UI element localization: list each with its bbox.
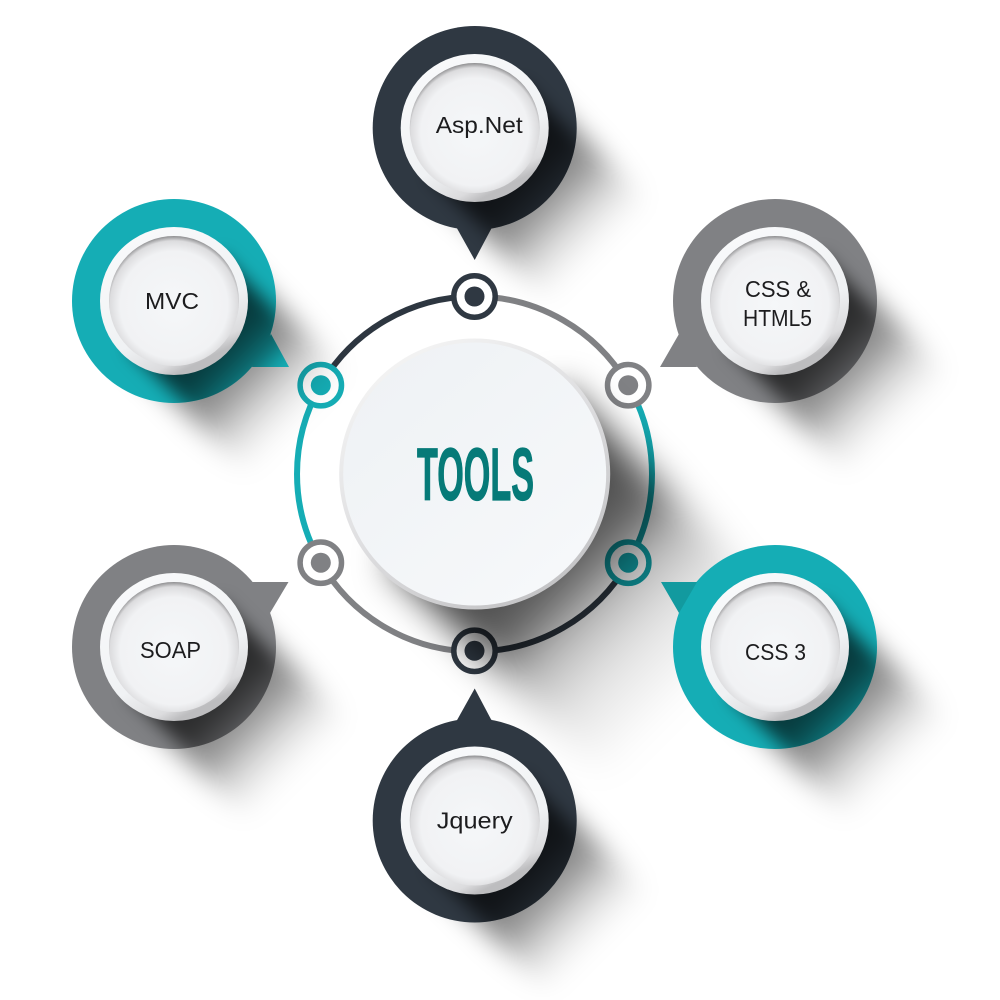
callout: CSS & HTML5 xyxy=(660,199,949,475)
label: Asp.Net xyxy=(436,112,523,138)
label: CSS 3 xyxy=(745,639,806,665)
central disc shadow xyxy=(387,386,782,781)
callout: Jquery xyxy=(373,688,649,994)
node: upper left xyxy=(300,364,341,406)
node: bottom xyxy=(454,630,495,672)
label xyxy=(743,276,812,331)
callout: MVC xyxy=(72,199,348,475)
callout: CSS 3 xyxy=(661,545,949,821)
node: top xyxy=(454,276,495,317)
callout: SOAP xyxy=(72,545,348,821)
node: upper right xyxy=(608,364,649,406)
callout: Asp.Net xyxy=(373,26,649,302)
node: lower right xyxy=(608,542,649,583)
label: Jquery xyxy=(437,808,513,834)
label: HTML5 xyxy=(743,305,812,331)
node: lower left xyxy=(300,542,341,583)
central disc: TOOLS xyxy=(417,433,534,516)
ring connecting the six nodes xyxy=(297,296,652,652)
central disc xyxy=(339,338,610,610)
label: SOAP xyxy=(140,637,201,663)
label: CSS & xyxy=(745,276,811,302)
label: MVC xyxy=(145,288,199,314)
